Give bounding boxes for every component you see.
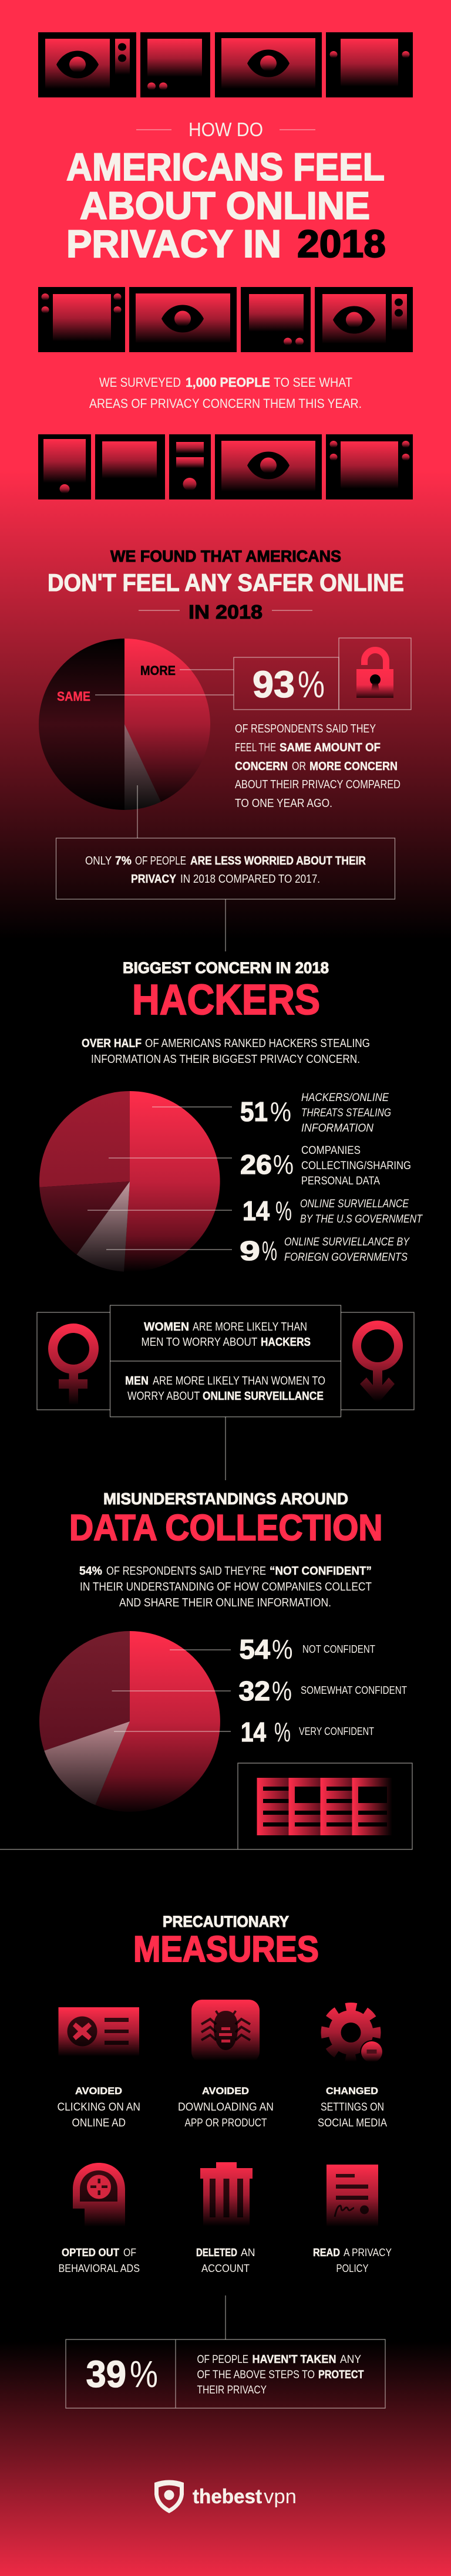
main title: AMERICANS FEEL bbox=[66, 145, 385, 188]
stat: 26% companies: COMPANIES bbox=[301, 1144, 361, 1157]
icon: female symbol bbox=[48, 1324, 99, 1407]
text: women: WOMEN bbox=[144, 1321, 189, 1333]
stat: 54% not confident: NOT CONFIDENT bbox=[302, 1643, 375, 1655]
stat: 26% companies: PERSONAL DATA bbox=[301, 1175, 380, 1187]
main title: ABOUT ONLINE bbox=[80, 184, 370, 227]
frame with rule bbox=[0, 1763, 412, 1849]
stat: 14% US government: ONLINE SURVIELLANCE bbox=[300, 1198, 409, 1210]
stat: 9% foreign governments bbox=[240, 1235, 410, 1266]
screen with four side buttons bbox=[326, 434, 413, 499]
stat: 51% hackers: THREATS STEALING bbox=[301, 1107, 391, 1119]
icon: trash can bbox=[200, 2162, 253, 2228]
survey intro text: WE SURVEYED bbox=[99, 375, 181, 390]
heading: biggest concern: BIGGEST CONCERN IN 2018 bbox=[123, 959, 329, 977]
illustration: row of surveillance screens, lower bbox=[38, 434, 413, 499]
phone screen bbox=[38, 434, 91, 499]
stat: 51% hackers: INFORMATION bbox=[301, 1122, 373, 1135]
slice: 14% very confident bbox=[44, 1721, 130, 1805]
stat: 14% US government: BY THE U.S GOVERNMENT bbox=[300, 1213, 423, 1225]
screen with two buttons bbox=[241, 287, 311, 352]
text: respondents description: FEEL THE bbox=[235, 741, 276, 754]
label: same: SAME bbox=[57, 689, 90, 704]
icon: servers bbox=[257, 1778, 392, 1835]
label bbox=[318, 2085, 387, 2129]
survey intro text: 1,000 PEOPLE bbox=[186, 375, 270, 390]
center box bbox=[110, 1305, 341, 1417]
text: respondents description: CONCERN bbox=[235, 760, 288, 773]
text: not confident description bbox=[79, 1565, 372, 1609]
wide screen with eye bbox=[129, 287, 237, 352]
text: respondents description bbox=[235, 723, 400, 810]
label: DOWNLOADING AN bbox=[178, 2101, 274, 2114]
heading: precautionary measures: MEASURES bbox=[133, 1929, 319, 1970]
label: DELETED bbox=[196, 2247, 237, 2258]
label: READ bbox=[313, 2247, 340, 2258]
text: not confident description: OF RESPONDENTS SAID THEY’RE bbox=[106, 1565, 266, 1578]
stat: 51% hackers bbox=[240, 1092, 391, 1135]
screen with eye and side panel bbox=[38, 32, 136, 97]
panel: gender differences bbox=[37, 1305, 414, 1417]
stat: 26% companies: 26 bbox=[240, 1149, 272, 1180]
label: APP OR PRODUCT bbox=[184, 2117, 267, 2129]
description: THEIR PRIVACY bbox=[197, 2384, 267, 2396]
icon: gear bbox=[325, 2007, 383, 2064]
stat: 32% somewhat confident: SOMEWHAT CONFIDENT bbox=[301, 1684, 407, 1696]
label bbox=[178, 2085, 274, 2129]
wordmark: thebest bbox=[193, 2486, 262, 2508]
logo: thebestvpn bbox=[154, 2480, 297, 2513]
callout: only 7%: ONLY bbox=[85, 855, 112, 867]
stat: 26% companies: % bbox=[273, 1149, 294, 1180]
stat: 51% hackers: 51 bbox=[240, 1096, 268, 1127]
pie chart: confidence bbox=[39, 1631, 220, 1812]
description: HAVEN'T TAKEN bbox=[253, 2354, 336, 2366]
text: women: ARE MORE LIKELY THAN bbox=[193, 1321, 307, 1333]
slice: 32% somewhat confident bbox=[39, 1631, 130, 1751]
label: OPTED OUT bbox=[62, 2247, 119, 2258]
description bbox=[197, 2354, 364, 2396]
stat: 14% US government: 14 bbox=[243, 1196, 270, 1226]
text: not confident description: IN THEIR UNDERSTANDING OF HOW COMPANIES COLLECT bbox=[80, 1581, 372, 1593]
text: women bbox=[141, 1321, 311, 1349]
main title bbox=[66, 145, 386, 265]
label: A PRIVACY bbox=[344, 2247, 392, 2258]
screen with eye and side panel bbox=[315, 287, 413, 352]
label: more: MORE bbox=[140, 663, 176, 678]
stat: 14% very confident: % bbox=[274, 1717, 291, 1747]
label: ONLINE AD bbox=[72, 2117, 126, 2129]
slice: 9% foreign governments bbox=[76, 1181, 130, 1272]
stat: 14% very confident bbox=[241, 1717, 374, 1747]
text: over half of americans: OF AMERICANS RANKED HACKERS STEALING bbox=[145, 1037, 370, 1050]
heading: data collection: MISUNDERSTANDINGS AROUND bbox=[103, 1490, 348, 1508]
stat: 14% US government: % bbox=[275, 1196, 292, 1226]
text: men bbox=[125, 1375, 325, 1403]
callout: only 7%: PRIVACY bbox=[131, 873, 177, 886]
stat: 14% US government bbox=[243, 1196, 423, 1226]
label: ACCOUNT bbox=[201, 2263, 250, 2274]
stat value: % bbox=[130, 2353, 158, 2395]
icon: shield bbox=[154, 2480, 184, 2513]
text: not confident description: “NOT CONFIDENT” bbox=[270, 1565, 372, 1578]
stacked device bbox=[169, 434, 211, 499]
text: men: WORRY ABOUT bbox=[127, 1390, 200, 1403]
heading: precautionary measures: PRECAUTIONARY bbox=[163, 1913, 289, 1930]
callout: only 7% bbox=[56, 785, 395, 951]
measure: opted out bbox=[59, 2163, 140, 2274]
illustration: row of surveillance screens, top bbox=[38, 32, 413, 97]
main title: PRIVACY IN bbox=[66, 222, 281, 265]
text: men: MEN bbox=[125, 1375, 149, 1387]
stat: 54% not confident: 54 bbox=[240, 1634, 270, 1665]
slice: 14% US government bbox=[39, 1181, 130, 1255]
label bbox=[58, 2085, 140, 2129]
icon: padlock bbox=[356, 650, 393, 698]
pie chart: biggest concerns bbox=[39, 1091, 220, 1272]
text: not confident description: AND SHARE THEIR ONLINE INFORMATION. bbox=[119, 1596, 331, 1609]
stat panel: 93% bbox=[234, 638, 411, 710]
wide screen with eye bbox=[215, 434, 322, 499]
label: SOCIAL MEDIA bbox=[318, 2117, 387, 2129]
leader lines from concerns chart bbox=[87, 1107, 232, 1250]
icon: document bbox=[327, 2165, 378, 2229]
stat: 51% hackers: HACKERS/ONLINE bbox=[301, 1092, 389, 1104]
heading: safer online: DON'T FEEL ANY SAFER ONLINE bbox=[48, 569, 404, 596]
callout: only 7%: ARE LESS WORRIED ABOUT THEIR bbox=[190, 855, 366, 867]
survey intro text bbox=[89, 375, 362, 411]
label bbox=[196, 2247, 255, 2274]
text: women: HACKERS bbox=[261, 1336, 311, 1349]
heading: safer online: WE FOUND THAT AMERICANS bbox=[110, 547, 341, 565]
slice: 26% companies bbox=[39, 1091, 130, 1187]
stat: 54% not confident bbox=[240, 1634, 375, 1665]
leader lines from pie chart bbox=[95, 670, 234, 695]
main title: 2018 bbox=[297, 222, 386, 265]
stat: 26% companies bbox=[240, 1144, 411, 1187]
label bbox=[59, 2247, 140, 2274]
kicker: how do: HOW DO bbox=[189, 119, 263, 140]
callout: only 7%: OF PEOPLE bbox=[135, 855, 186, 867]
heading: biggest concern: HACKERS bbox=[132, 977, 320, 1024]
survey intro text: AREAS OF PRIVACY CONCERN THEM THIS YEAR. bbox=[89, 396, 362, 411]
description: ANY bbox=[340, 2354, 361, 2366]
stat: 32% somewhat confident: 32 bbox=[238, 1676, 270, 1706]
label: AN bbox=[241, 2247, 255, 2258]
measure: changed settings bbox=[318, 2007, 387, 2129]
heading: data collection bbox=[69, 1490, 383, 1548]
text: men: ARE MORE LIKELY THAN WOMEN TO bbox=[153, 1375, 325, 1387]
stat box bbox=[234, 657, 339, 710]
label: BEHAVIORAL ADS bbox=[59, 2263, 140, 2274]
description: OF PEOPLE bbox=[197, 2354, 248, 2366]
text: over half of americans: INFORMATION AS THEIR BIGGEST PRIVACY CONCERN. bbox=[91, 1053, 360, 1066]
measure: read privacy policy bbox=[313, 2165, 392, 2274]
illustration: row of surveillance screens, middle bbox=[38, 287, 413, 352]
text: respondents description: ABOUT THEIR PRIVACY COMPARED bbox=[235, 778, 400, 791]
stat value: % bbox=[298, 663, 325, 705]
slice: same bbox=[39, 639, 124, 810]
label: OF bbox=[123, 2247, 136, 2258]
label: AVOIDED bbox=[202, 2085, 249, 2096]
heading: safer online: IN 2018 bbox=[189, 601, 262, 623]
stat: 14% very confident: 14 bbox=[241, 1717, 266, 1747]
text: women: MEN TO WORRY ABOUT bbox=[141, 1336, 257, 1349]
measure: avoided downloading bbox=[178, 2000, 274, 2129]
text: over half of americans bbox=[82, 1037, 370, 1066]
stat: 14% very confident: VERY CONFIDENT bbox=[299, 1726, 374, 1737]
label: POLICY bbox=[336, 2263, 369, 2274]
slice: 54% not confident bbox=[95, 1631, 220, 1812]
tablet screen bbox=[95, 434, 165, 499]
wide screen with eye bbox=[215, 32, 322, 97]
label: CLICKING ON AN bbox=[58, 2101, 140, 2114]
callout: only 7%: 7% bbox=[115, 855, 132, 867]
icon: male symbol bbox=[352, 1321, 403, 1404]
heading: data collection: DATA COLLECTION bbox=[69, 1508, 383, 1548]
label: SETTINGS ON bbox=[321, 2101, 384, 2114]
screen with four side buttons bbox=[38, 287, 125, 352]
survey intro text: TO SEE WHAT bbox=[274, 375, 352, 390]
slice: 51% hackers bbox=[124, 1091, 220, 1272]
callout: only 7%: IN 2018 COMPARED TO 2017. bbox=[180, 873, 320, 886]
slice: less bbox=[124, 724, 161, 810]
title block bbox=[66, 119, 386, 265]
stat: 54% not confident: % bbox=[272, 1634, 292, 1665]
text: respondents description: OF RESPONDENTS SAID THEY bbox=[235, 723, 376, 735]
text: over half of americans: OVER HALF bbox=[82, 1037, 142, 1050]
label bbox=[313, 2247, 392, 2274]
panel: 39% took no steps bbox=[66, 2339, 385, 2408]
measure: avoided clicking ad bbox=[58, 2007, 140, 2129]
stat: 9% foreign governments: % bbox=[262, 1235, 277, 1266]
icon: head with target bbox=[73, 2163, 125, 2229]
box bbox=[66, 2339, 385, 2408]
panel: server racks bbox=[0, 1763, 412, 1849]
label: AVOIDED bbox=[75, 2085, 122, 2096]
text: respondents description: TO ONE YEAR AGO. bbox=[235, 797, 332, 810]
stat: 32% somewhat confident bbox=[238, 1676, 407, 1706]
icon: ad card bbox=[59, 2007, 139, 2058]
text: respondents description: OR bbox=[292, 760, 306, 773]
icon: bug bbox=[191, 2000, 260, 2062]
heading: biggest concern bbox=[123, 959, 329, 1024]
stat: 9% foreign governments: ONLINE SURVIELLANCE BY bbox=[284, 1236, 410, 1248]
stat value: 39 bbox=[86, 2353, 126, 2395]
screen with side buttons bbox=[326, 32, 413, 97]
screen with two buttons bbox=[140, 32, 210, 97]
lock box bbox=[339, 638, 411, 710]
heading: precautionary measures bbox=[133, 1913, 319, 1970]
text: not confident description: 54% bbox=[79, 1565, 102, 1578]
stat: 32% somewhat confident: % bbox=[272, 1676, 292, 1706]
stat: 51% hackers: % bbox=[270, 1096, 291, 1127]
text: men: ONLINE SURVEILLANCE bbox=[203, 1390, 324, 1403]
text: respondents description: SAME AMOUNT OF bbox=[280, 741, 381, 754]
stat value: 93 bbox=[253, 663, 295, 705]
description: PROTECT bbox=[318, 2369, 364, 2381]
measure: deleted account bbox=[196, 2162, 255, 2274]
stat: 9% foreign governments: FORIEGN GOVERNMENTS bbox=[284, 1251, 408, 1264]
wordmark: vpn bbox=[264, 2486, 297, 2508]
pie chart: concern compared to last year bbox=[39, 639, 210, 810]
outer frame bbox=[37, 1312, 414, 1410]
heading: safer online bbox=[48, 547, 404, 623]
stat: 9% foreign governments: 9 bbox=[240, 1235, 260, 1266]
label: CHANGED bbox=[326, 2085, 378, 2096]
text: respondents description: MORE CONCERN bbox=[309, 760, 398, 773]
leader lines from confidence chart bbox=[112, 1650, 231, 1731]
description: OF THE ABOVE STEPS TO bbox=[197, 2369, 315, 2381]
slice: more bbox=[124, 639, 210, 802]
stat: 26% companies: COLLECTING/SHARING bbox=[301, 1160, 411, 1172]
